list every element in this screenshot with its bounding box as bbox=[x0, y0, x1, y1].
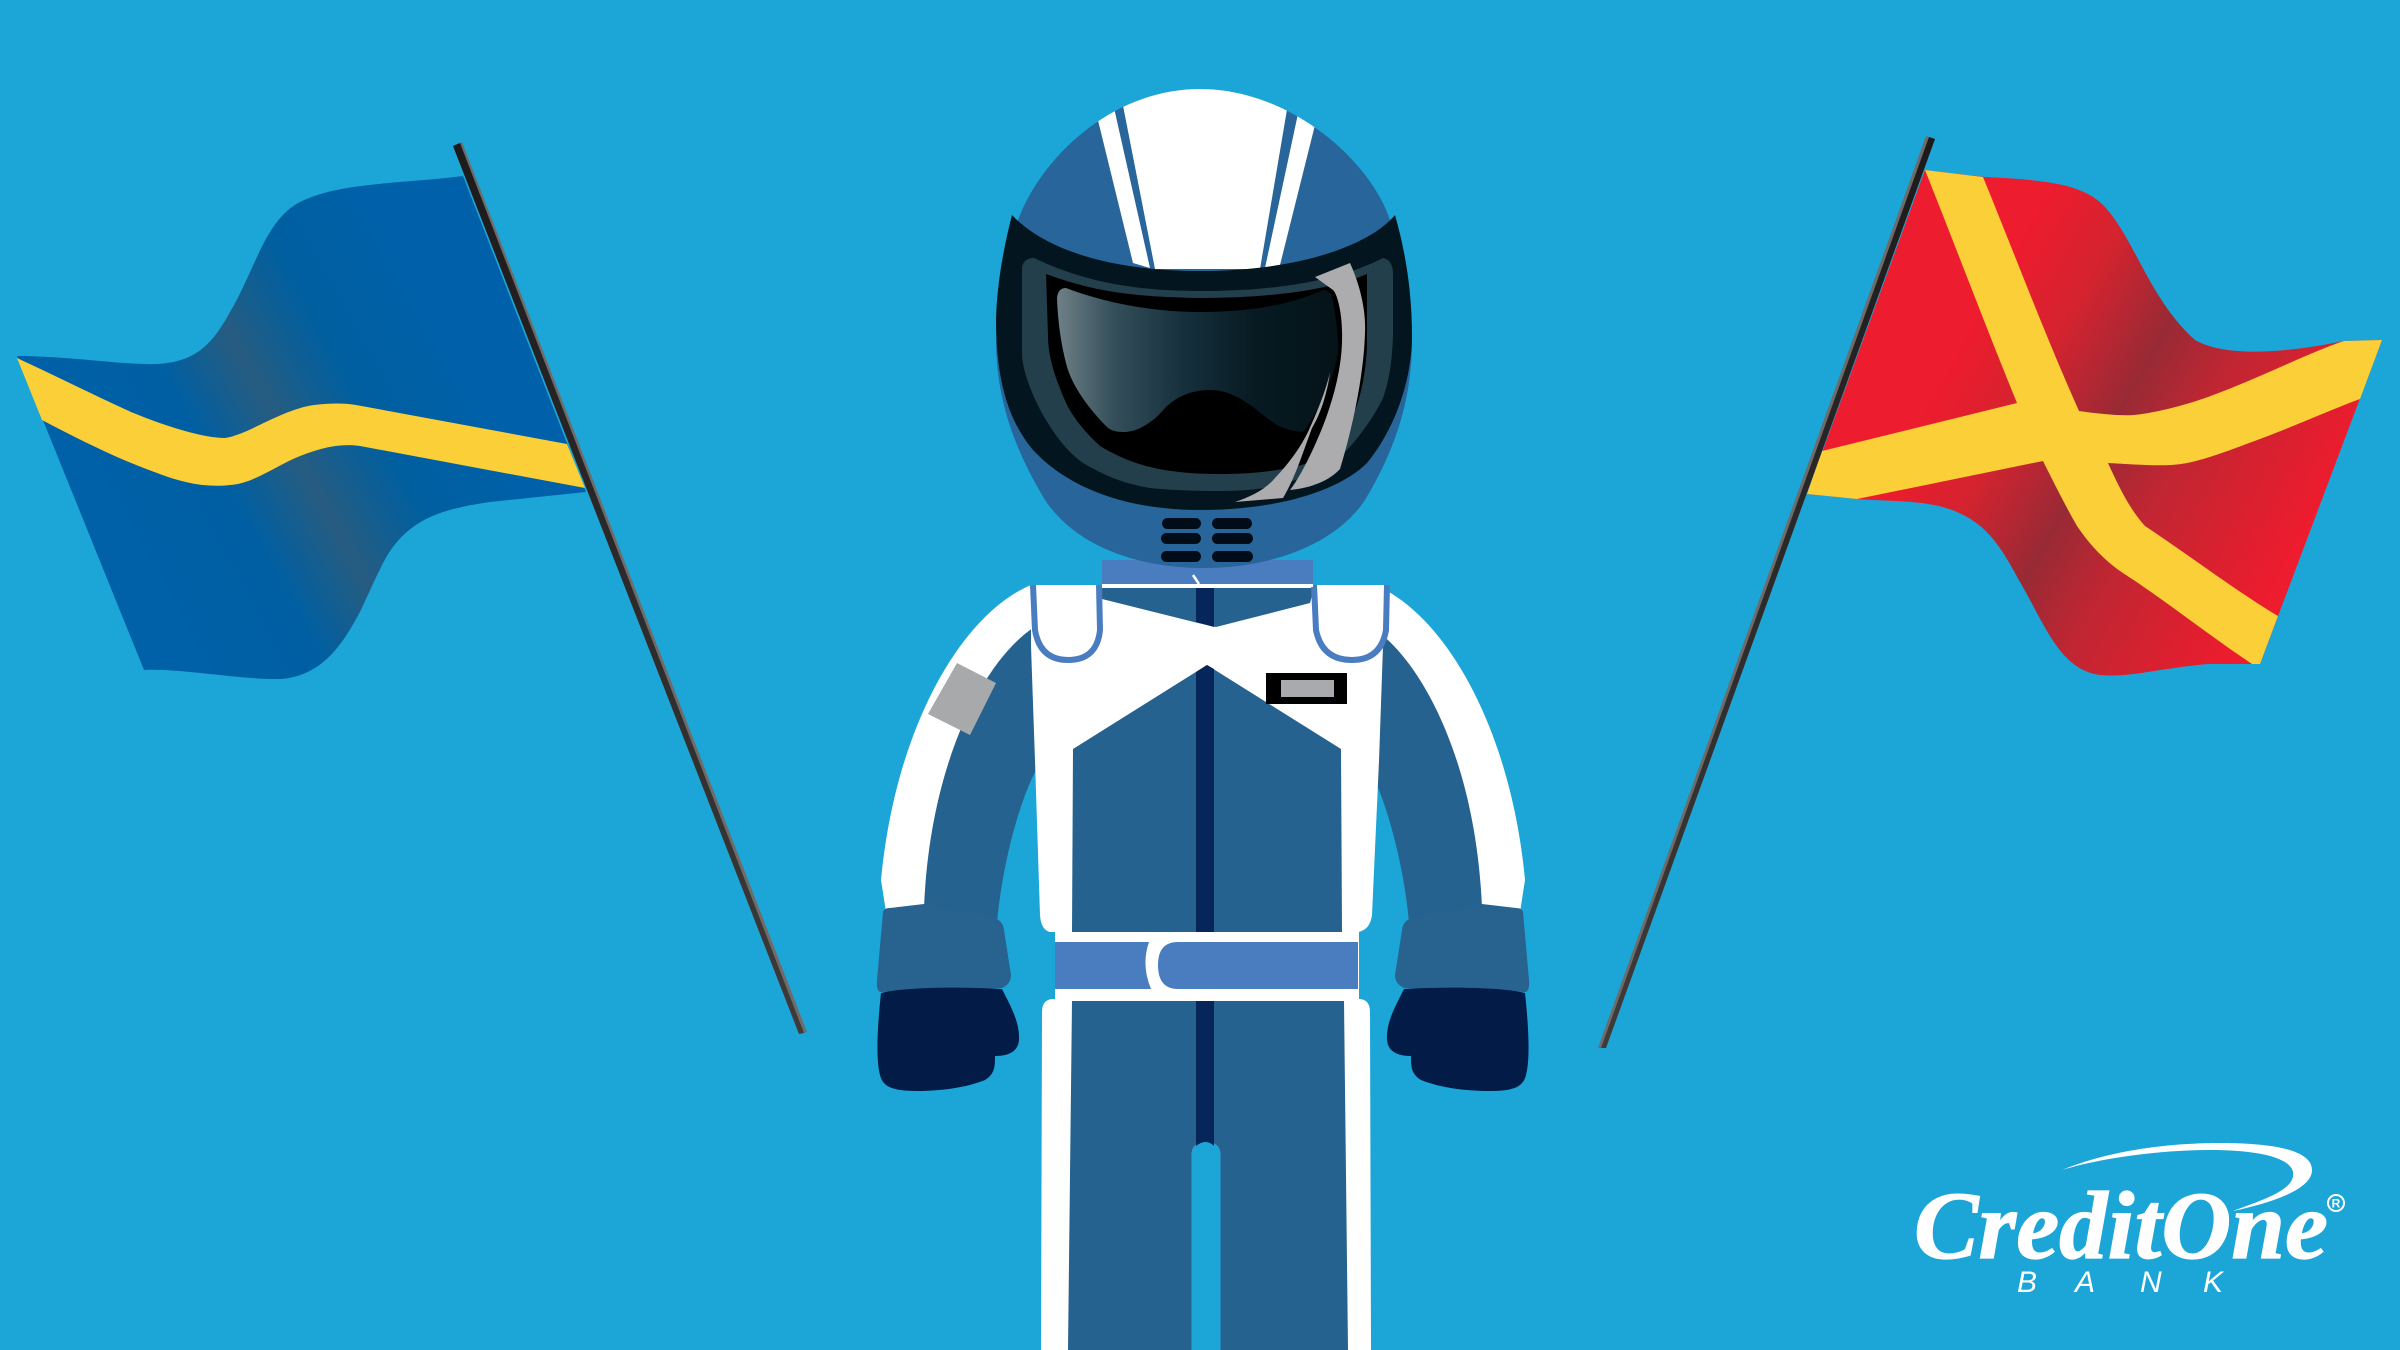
logo wordmark: CreditOne bbox=[1914, 1172, 2328, 1279]
belt white band bbox=[1055, 932, 1359, 1001]
left sleeve bbox=[877, 585, 1037, 1091]
collar bbox=[1102, 560, 1313, 587]
chest zipper bbox=[1196, 665, 1214, 932]
race driver figure bbox=[877, 80, 1529, 1350]
upper zipper bbox=[1196, 588, 1214, 627]
blue trousers bbox=[1068, 1001, 1348, 1350]
white leg piping bbox=[1041, 999, 1371, 1350]
visor black opening bbox=[1046, 274, 1367, 474]
white torso bbox=[1031, 585, 1388, 932]
white crown stripes bbox=[1093, 80, 1320, 269]
sleeve white stripe bbox=[1370, 585, 1525, 912]
sleeve white stripe bbox=[881, 585, 1036, 912]
visor frame bbox=[996, 215, 1412, 510]
name badge bbox=[1266, 673, 1347, 704]
chin vents bbox=[1161, 518, 1253, 562]
lower chest panel bbox=[1072, 665, 1342, 932]
helmet bbox=[996, 80, 1412, 587]
registered mark: R bbox=[2332, 1196, 2341, 1210]
right red flag bbox=[1598, 136, 2382, 1048]
upper chest panel bbox=[1102, 588, 1314, 627]
cuff bbox=[1395, 904, 1529, 992]
yellow cross stripes bbox=[1807, 170, 2382, 664]
Credit One Bank logo bbox=[1914, 1143, 2344, 1299]
sleeve blue panel bbox=[924, 628, 1037, 922]
sleeve blue panel bbox=[1369, 628, 1482, 922]
right sleeve bbox=[1369, 585, 1529, 1091]
logo swoosh bbox=[2062, 1143, 2312, 1211]
left blue flag bbox=[17, 142, 807, 1034]
visor lens bbox=[1057, 288, 1338, 432]
yellow stripe bbox=[17, 358, 585, 488]
visor reflection bbox=[1235, 263, 1365, 502]
arm patch bbox=[928, 663, 996, 735]
right flag pole bbox=[1598, 136, 1935, 1048]
torso bbox=[1031, 585, 1388, 932]
belt right section bbox=[1158, 942, 1358, 989]
red flag cloth bbox=[1807, 170, 2382, 676]
left shoulder strap bbox=[1033, 585, 1100, 660]
trouser zipper bbox=[1196, 1001, 1214, 1146]
logo BANK text: BANK bbox=[2017, 1266, 2225, 1299]
visor inner ring bbox=[1022, 258, 1393, 491]
helmet shell bbox=[996, 89, 1412, 568]
glove bbox=[1387, 988, 1529, 1091]
left flag pole bbox=[453, 142, 807, 1034]
belt bbox=[1055, 932, 1359, 1001]
registered mark bbox=[2328, 1195, 2344, 1211]
right shoulder strap bbox=[1314, 585, 1387, 660]
belt left section bbox=[1055, 942, 1151, 989]
left leg and right leg bbox=[1041, 999, 1371, 1350]
glove bbox=[877, 988, 1019, 1091]
cuff bbox=[877, 904, 1011, 992]
blue flag cloth bbox=[17, 176, 586, 679]
